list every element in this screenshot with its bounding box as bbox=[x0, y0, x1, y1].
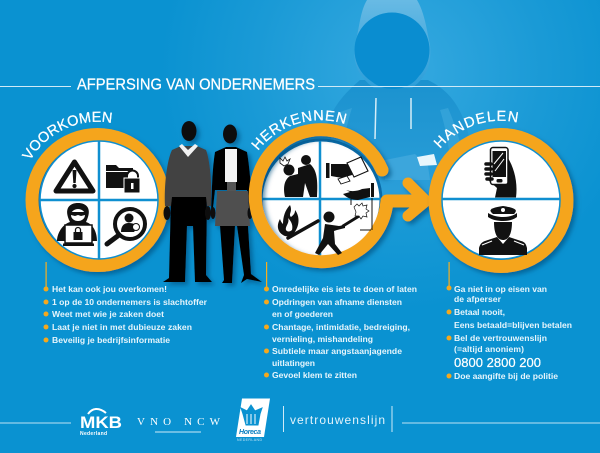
list: handelen: (=altijd anoniem) bbox=[454, 344, 524, 354]
divider bbox=[442, 198, 560, 200]
logo: vertrouwenslijn: vertrouwenslijn bbox=[290, 413, 385, 427]
list: handelen bbox=[446, 284, 572, 381]
list: herkennen: Subtiele maar angstaanjagende bbox=[272, 346, 402, 356]
white disc bbox=[442, 141, 560, 259]
icon: magnifier over person bbox=[107, 209, 145, 244]
list: voorkomen: Laat je niet in met dubieuze zaken bbox=[52, 322, 192, 332]
icon: flame and match bbox=[278, 205, 318, 238]
panel: herkennen bbox=[248, 110, 430, 287]
hooded extortionist background figure bbox=[318, 0, 476, 200]
woman bbox=[210, 124, 262, 283]
white disc bbox=[40, 141, 158, 259]
list: handelen: Eens betaald=blijven betalen bbox=[454, 320, 572, 330]
list: herkennen: Opdringen van afname diensten bbox=[272, 297, 402, 307]
connector line voorkomen bbox=[46, 262, 47, 289]
list: herkennen: Chantage, intimidatie, bedreiging, bbox=[272, 322, 410, 332]
quadrant dividers bbox=[261, 141, 381, 259]
white disc bbox=[261, 140, 381, 260]
icon: hacker with laptop bbox=[57, 203, 97, 246]
list: herkennen: Gevoel klem te zitten bbox=[272, 370, 357, 380]
silhouettes of entrepreneurs bbox=[163, 121, 262, 283]
icon: assault bbox=[280, 155, 317, 197]
list: voorkomen: Het kan ook jou overkomen! bbox=[52, 284, 167, 294]
icon: warning triangle bbox=[56, 162, 93, 191]
list: herkennen bbox=[264, 284, 417, 380]
list: herkennen: en of goederen bbox=[272, 309, 333, 319]
icon: folder with lock bbox=[106, 165, 140, 193]
logo: VNO NCW: VNO NCW bbox=[137, 416, 221, 428]
man bbox=[163, 121, 212, 282]
list: voorkomen: 1 op de 10 ondernemers is slachtoffer bbox=[52, 297, 208, 307]
list: voorkomen: Weet met wie je zaken doet bbox=[52, 309, 164, 319]
list: voorkomen bbox=[44, 284, 208, 345]
list: handelen: Ga niet in op eisen van bbox=[454, 284, 547, 294]
quadrant dividers bbox=[40, 141, 158, 259]
title rule left bbox=[0, 86, 71, 87]
list: handelen: 0800 2800 200 bbox=[454, 355, 541, 370]
logo: Koninklijke Horeca Nederland: Horeca bbox=[239, 429, 261, 436]
list: herkennen: vernieling, mishandeling bbox=[272, 334, 373, 344]
orange ring bbox=[435, 134, 567, 266]
footer rule left bbox=[0, 422, 71, 424]
heading: handelen: HANDELEN bbox=[433, 110, 518, 148]
logo: MKB Nederland bbox=[80, 409, 122, 437]
title: AFPERSING VAN ONDERNEMERS bbox=[77, 76, 315, 94]
heading: herkennen: HERKENNEN bbox=[251, 110, 347, 150]
logo: Koninklijke Horeca Nederland bbox=[236, 398, 270, 442]
panel: handelen bbox=[428, 110, 579, 286]
heading: voorkomen: VOORKOMEN bbox=[21, 112, 112, 158]
logo: Koninklijke Horeca Nederland: NEDERLAND bbox=[237, 438, 262, 442]
panel: voorkomen bbox=[21, 112, 171, 287]
list: handelen: Doe aangifte bij de politie bbox=[454, 371, 558, 381]
logo: MKB Nederland: Nederland bbox=[80, 431, 107, 437]
list: herkennen: uitlatingen bbox=[272, 358, 315, 368]
list: voorkomen: Beveilig je bedrijfsinformatie bbox=[52, 335, 170, 345]
logo: MKB Nederland: MKB bbox=[80, 413, 122, 432]
list: handelen: de afperser bbox=[454, 294, 502, 304]
list: handelen: Betaal nooit, bbox=[454, 307, 505, 317]
title rule right bbox=[318, 86, 600, 87]
connector line handelen bbox=[448, 262, 450, 289]
logo: vertrouwenslijn bbox=[283, 406, 392, 432]
orange ring bbox=[32, 134, 163, 266]
icon: police officer bbox=[479, 206, 527, 255]
list: herkennen: Onredelijke eis iets te doen of laten bbox=[272, 284, 417, 294]
icon: person smashing with bat bbox=[315, 198, 372, 255]
footer rule right bbox=[402, 422, 600, 424]
arrow ring from herkennen to handelen bbox=[255, 130, 426, 262]
list: handelen: Bel de vertrouwenslijn bbox=[454, 333, 547, 343]
icon: hand holding phone bbox=[486, 148, 517, 198]
connector line herkennen bbox=[266, 262, 267, 289]
icon: hands exchanging money bbox=[326, 157, 374, 200]
